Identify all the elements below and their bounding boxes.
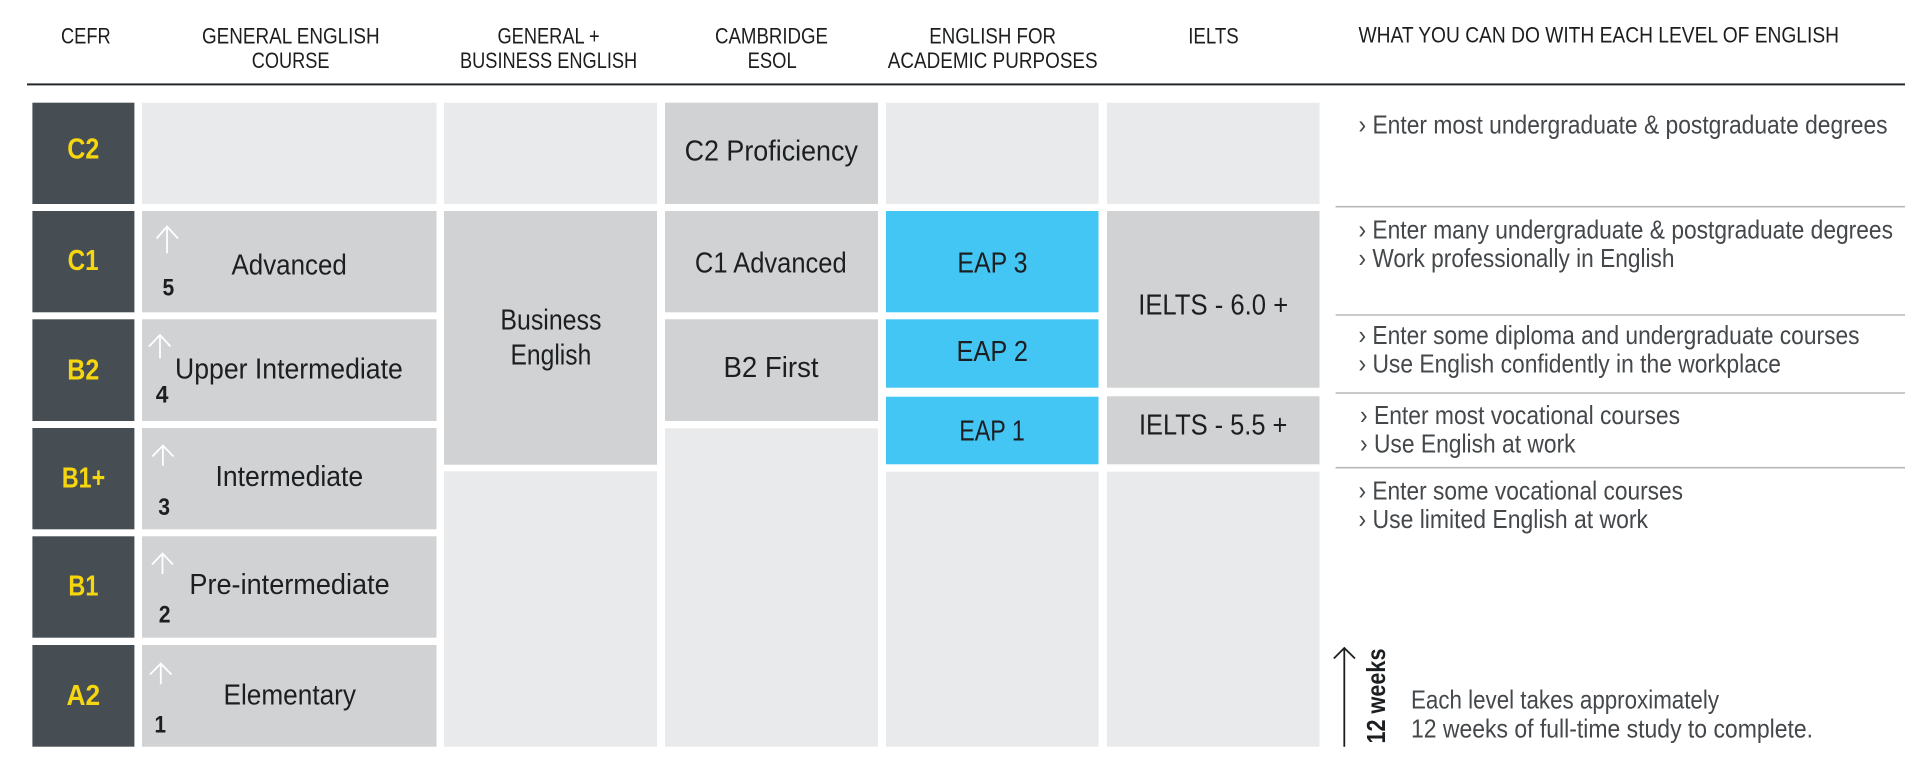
course: Pre-intermediate, level 2 (142, 536, 436, 638)
level C1 (32, 211, 134, 312)
outcomes: B1+ (1360, 400, 1680, 458)
icon: up arrow (152, 446, 174, 466)
level B1: B1 (68, 571, 98, 603)
score: IELTS 5.5+: IELTS - 5.5 + (1139, 410, 1287, 442)
heading: General English course (202, 23, 380, 73)
course: Upper Intermediate, level 4: Upper Intermediate (175, 353, 403, 385)
heading: IELTS: IELTS (1188, 23, 1239, 48)
level A2: A2 (66, 680, 100, 712)
level B1+: B1+ (62, 462, 105, 494)
level B2: B2 (67, 354, 99, 386)
course: EAP 1: EAP 1 (959, 416, 1025, 448)
course: Elementary, level 1: 1 (154, 711, 166, 738)
score: IELTS 6.0+ (1107, 211, 1320, 388)
icon: up arrow (150, 664, 172, 684)
callout: 12 weeks per level (1334, 648, 1813, 747)
score: IELTS 5.5+ (1107, 396, 1320, 464)
column: General English course (142, 103, 436, 747)
level B1+ (32, 428, 134, 529)
course: Pre-intermediate, level 2: 2 (159, 602, 170, 629)
exam: C2 Proficiency (665, 103, 878, 204)
level C2 (32, 103, 134, 204)
exam: B2 First: B2 First (724, 352, 819, 384)
heading: What you can do: WHAT YOU CAN DO WITH EACH LEVEL OF ENGLISH (1358, 22, 1839, 48)
column: CEFR levels (32, 103, 134, 747)
course: EAP 2: EAP 2 (956, 336, 1028, 368)
course: Upper Intermediate, level 4 (142, 319, 436, 421)
empty C2 cell (142, 103, 436, 204)
heading: English for Academic Purposes (888, 23, 1098, 73)
empty lower cell (886, 472, 1098, 747)
note: level duration: Each level takes approximately (1411, 684, 1719, 714)
empty lower cell (1107, 472, 1320, 747)
empty C2 cell (1107, 103, 1320, 204)
column: Cambridge ESOL (665, 103, 878, 747)
outcomes: B2: › Use English confidently in the workplace (1358, 348, 1781, 378)
course: Intermediate, level 3 (142, 428, 436, 529)
note: level duration (1411, 684, 1813, 743)
course: Elementary, level 1: Elementary (224, 679, 356, 711)
header row (61, 22, 1839, 73)
arrow: 12 weeks (1334, 648, 1355, 747)
course: EAP 3: EAP 3 (957, 248, 1028, 280)
empty lower cell (444, 471, 657, 747)
exam: C1 Advanced (665, 211, 878, 312)
exam: B2 First (665, 319, 878, 421)
heading: General + Business English: GENERAL + (498, 23, 600, 48)
heading: General English course: COURSE (252, 48, 330, 73)
outcomes: B1 (1358, 475, 1683, 534)
level A2 (32, 645, 134, 747)
level B2 (32, 319, 134, 421)
heading: General English course: GENERAL ENGLISH (202, 23, 380, 48)
course: EAP 1 (886, 397, 1098, 464)
course: Intermediate, level 3: Intermediate (216, 461, 363, 493)
heading: General + Business English (460, 23, 637, 73)
panel: what you can do with each level (1358, 109, 1893, 534)
course: Business English: English (510, 339, 591, 371)
course: Advanced, level 5 (142, 211, 436, 312)
heading: CEFR: CEFR (61, 23, 111, 48)
empty lower cell (665, 428, 878, 747)
course: Pre-intermediate, level 2: Pre-intermediate (189, 569, 390, 601)
outcomes: B1+: › Use English at work (1360, 428, 1576, 458)
outcomes: C1: › Work professionally in English (1358, 243, 1674, 273)
course: Advanced, level 5: 5 (162, 275, 174, 302)
level C2: C2 (67, 133, 99, 165)
icon: up arrow (149, 335, 170, 358)
icon: up arrow (157, 226, 178, 253)
outcomes: B2: › Enter some diploma and undergraduate courses (1358, 320, 1860, 350)
column: IELTS (1107, 103, 1320, 747)
exam: C2 Proficiency: C2 Proficiency (685, 136, 858, 168)
level B1 (32, 536, 134, 638)
column: General + Business English (444, 103, 657, 747)
heading: English for Academic Purposes: ENGLISH FOR (929, 23, 1056, 48)
label: 12 weeks: 12 weeks (1361, 648, 1391, 744)
outcomes: B1: › Enter some vocational courses (1358, 475, 1683, 505)
column: English for Academic Purposes (886, 103, 1098, 747)
course: Upper Intermediate, level 4: 4 (156, 381, 169, 408)
exam: C1 Advanced: C1 Advanced (695, 248, 847, 280)
heading: General + Business English: BUSINESS ENGLISH (460, 48, 637, 73)
course: Intermediate, level 3: 3 (158, 494, 170, 521)
outcomes: B1+: › Enter most vocational courses (1360, 400, 1680, 430)
heading: Cambridge ESOL (715, 23, 828, 73)
icon: up arrow (152, 554, 173, 574)
empty C2 cell (886, 103, 1098, 204)
heading: Cambridge ESOL: CAMBRIDGE (715, 23, 828, 48)
outcomes: C1 (1358, 215, 1893, 273)
empty C2 cell (444, 103, 657, 204)
outcomes: B1: › Use limited English at work (1358, 504, 1649, 534)
course: EAP 2 (886, 319, 1098, 388)
course: Advanced, level 5: Advanced (232, 249, 347, 281)
note: level duration: 12 weeks of full-time study to complete. (1411, 713, 1813, 743)
heading: English for Academic Purposes: ACADEMIC PURPOSES (888, 48, 1098, 73)
course: Business English (444, 211, 657, 465)
course: EAP 3 (886, 211, 1098, 312)
course: Elementary, level 1 (142, 645, 436, 747)
score: IELTS 6.0+: IELTS - 6.0 + (1138, 289, 1288, 321)
level C1: C1 (68, 245, 99, 277)
course: Business English: Business (500, 304, 601, 336)
outcomes: B2 (1358, 320, 1860, 378)
heading: Cambridge ESOL: ESOL (748, 48, 797, 73)
